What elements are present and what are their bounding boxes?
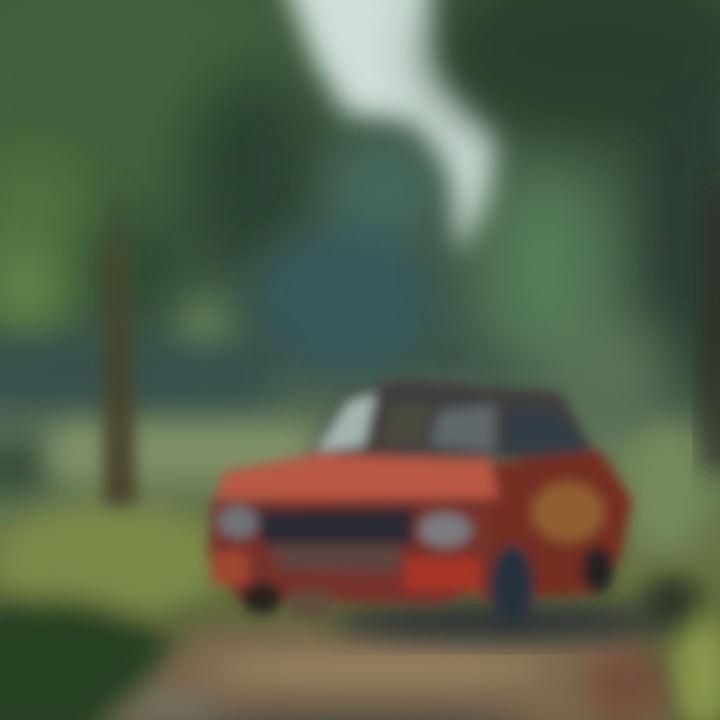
left dark tree line xyxy=(0,345,270,490)
dirt road xyxy=(90,625,680,720)
left tree canopy xyxy=(0,0,315,330)
car shadow xyxy=(330,604,670,640)
far right trunk xyxy=(704,190,720,470)
car body side xyxy=(480,450,632,600)
sky xyxy=(280,0,498,255)
far central tree xyxy=(255,135,443,375)
car cabin and windows xyxy=(310,380,600,460)
tree trunk xyxy=(102,170,136,505)
car wheels xyxy=(242,545,614,625)
car hood xyxy=(215,454,498,502)
sunlit foliage patch xyxy=(0,246,229,375)
car front xyxy=(208,498,492,605)
right tree canopy xyxy=(430,0,720,420)
meadow xyxy=(0,425,720,720)
red car xyxy=(208,380,632,625)
